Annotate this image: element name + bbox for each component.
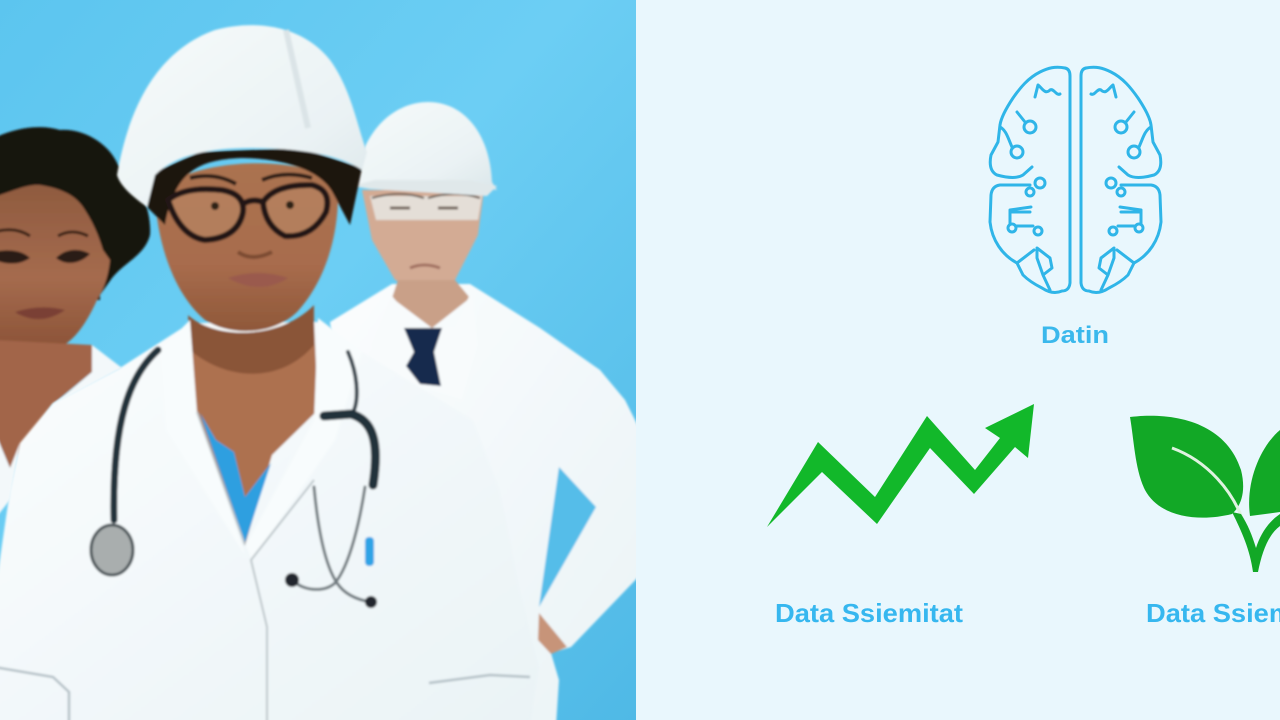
- icon: eyeglasses: [168, 185, 327, 240]
- icon: green leaves: [1130, 416, 1280, 572]
- person: woman, back left: [0, 127, 150, 520]
- icon: stethoscope: [91, 350, 377, 608]
- panel: photo of professionals: [0, 0, 645, 720]
- label: chart caption: Data Ssiemitat: [775, 598, 963, 628]
- label: brain caption: Datin: [1041, 322, 1109, 349]
- icon: circuit brain: [990, 67, 1161, 292]
- person: woman in glasses, centre front: [0, 25, 539, 720]
- chart icon: rising green arrow: [767, 404, 1034, 527]
- panel: data icons: [636, 0, 1280, 720]
- person: man in hard hat, back right: [330, 102, 645, 720]
- icon: hard hat: [117, 25, 367, 207]
